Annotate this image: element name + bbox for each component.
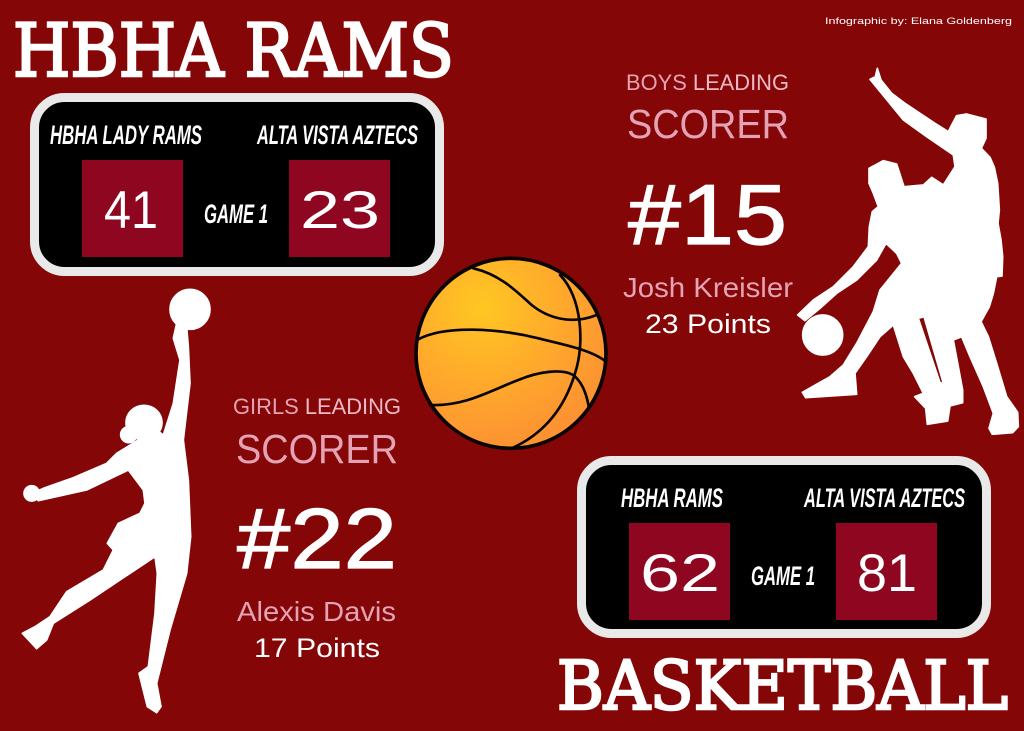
- team label: HBHA Rams: HBHA RAMS: [621, 483, 723, 513]
- silhouette: boys players: [798, 68, 1018, 434]
- player number: #15: [628, 168, 787, 263]
- title: Basketball: BASKETBALL: [557, 647, 1008, 725]
- score box: 62: [629, 523, 730, 620]
- girls leading scorer block: [233, 394, 401, 663]
- scoreboard: girls game: [34, 98, 440, 272]
- player name: Alexis Davis: [237, 596, 396, 627]
- team label: Alta Vista Aztecs: ALTA VISTA AZTECS: [256, 120, 418, 150]
- score box: 41: 41: [104, 181, 158, 240]
- player name: Josh Kreisler: [623, 272, 793, 303]
- title: HBHA RAMS: HBHA RAMS: [13, 9, 454, 94]
- points: 23 Points: [645, 309, 771, 339]
- team label: HBHA Lady Rams: HBHA LADY RAMS: [50, 120, 202, 150]
- score box: 41: [82, 160, 183, 257]
- score box: 23: [289, 160, 390, 257]
- score box: 81: [836, 523, 937, 620]
- game label: GAME 1: [751, 561, 815, 591]
- heading: girls leading: GIRLS LEADING: [233, 394, 401, 419]
- credit line: Infographic by: Elana Goldenberg: [825, 16, 1012, 27]
- game label: GAME 1: [204, 199, 268, 229]
- heading: scorer: SCORER: [627, 101, 789, 147]
- basketball: [416, 258, 606, 448]
- heading: boys leading: BOYS LEADING: [626, 70, 789, 95]
- silhouette: girl player: [22, 289, 210, 713]
- points: 17 Points: [254, 633, 380, 663]
- player number: #22: [237, 492, 397, 587]
- scoreboard: boys game: [582, 460, 986, 634]
- score box: 23: 23: [300, 181, 380, 240]
- score box: 81: 81: [857, 544, 917, 603]
- score box: 62: 62: [640, 544, 720, 603]
- boys leading scorer block: [623, 70, 793, 339]
- heading: scorer: SCORER: [236, 426, 398, 472]
